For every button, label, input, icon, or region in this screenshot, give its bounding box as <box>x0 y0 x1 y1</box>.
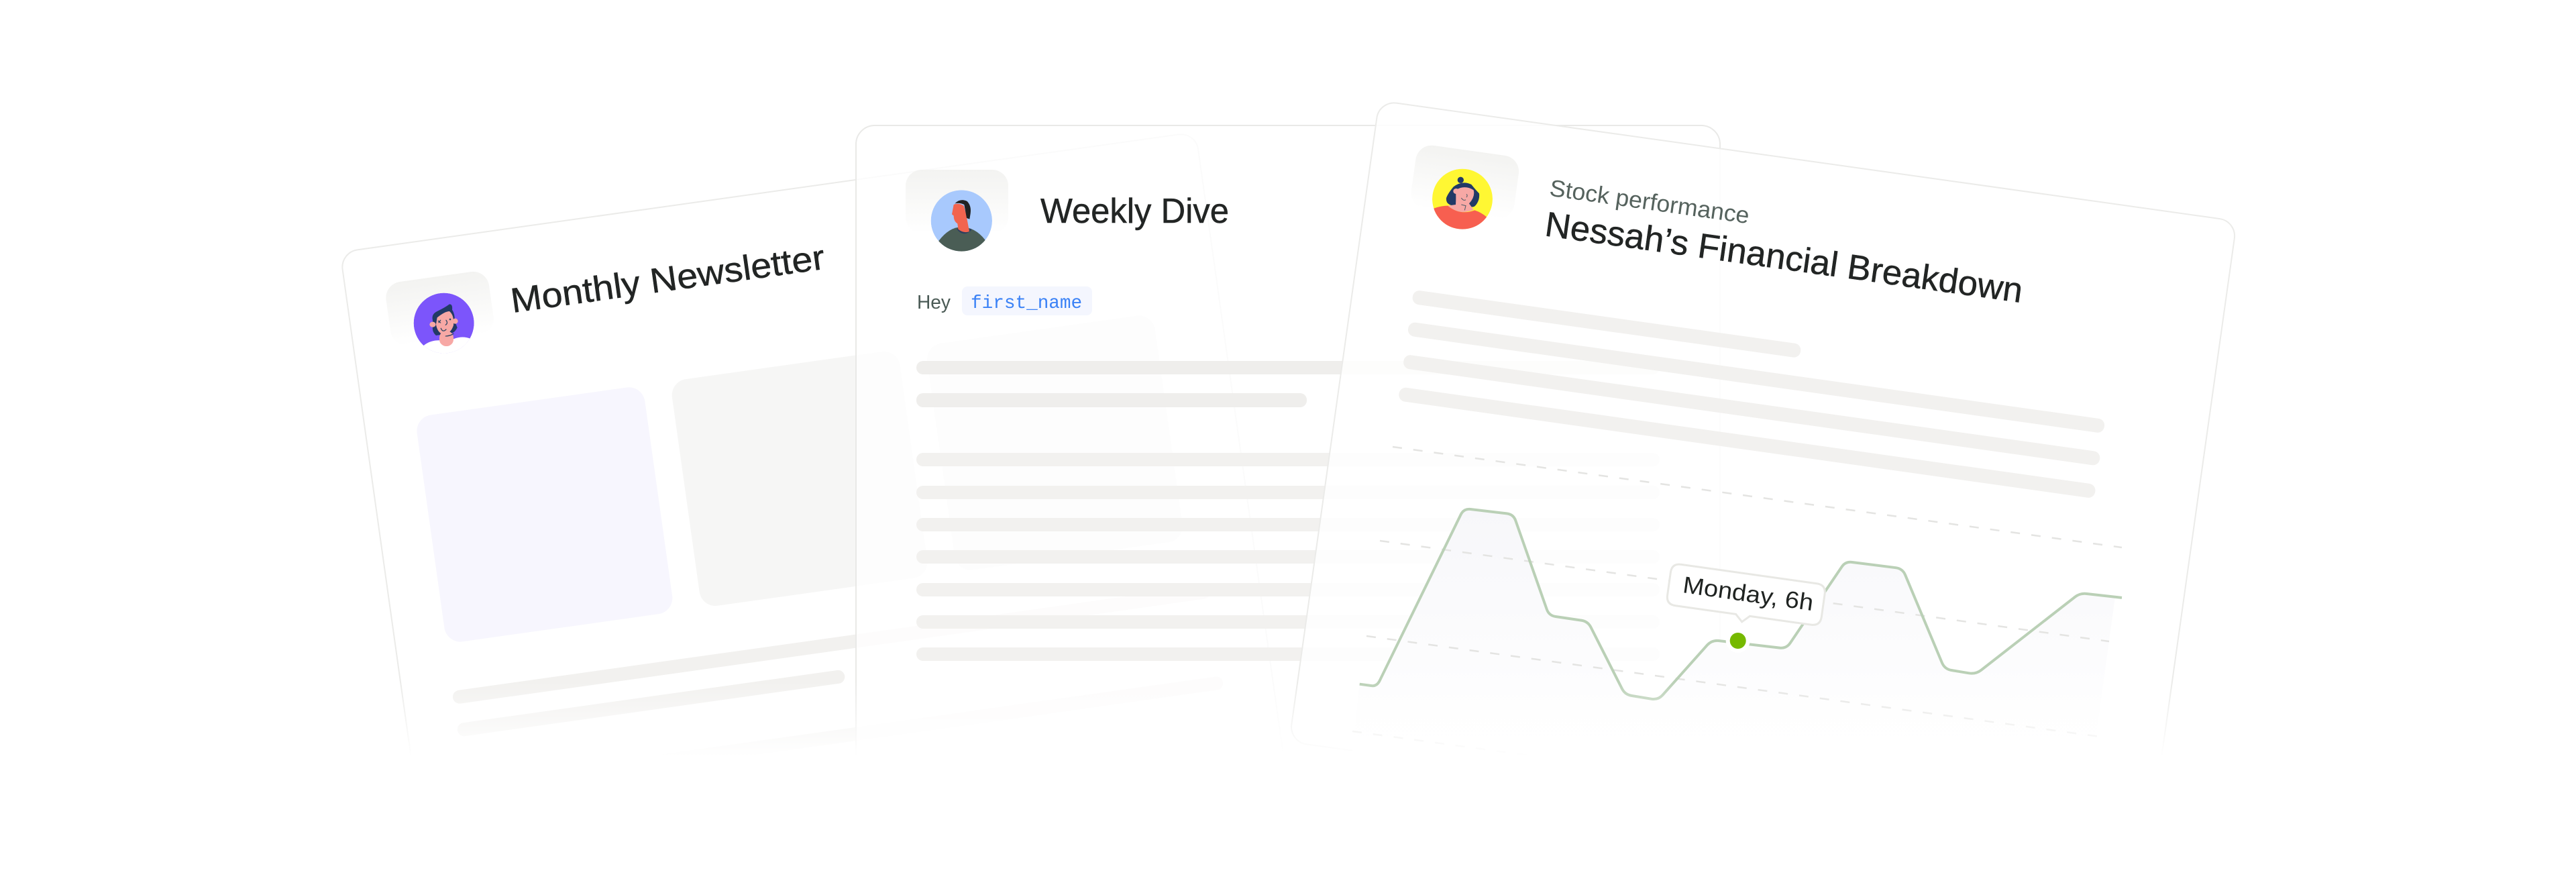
text: greeting: Hey <box>917 292 951 313</box>
image placeholder: lilac block <box>415 385 674 644</box>
tag: first_name variable chip <box>962 286 1092 315</box>
tooltip: Monday, 6h: Monday, 6h <box>1681 572 1815 616</box>
chart data line <box>1360 509 2122 699</box>
text placeholder bar two <box>456 670 846 737</box>
icon: blue avatar <box>931 190 992 253</box>
image placeholder: third block <box>925 313 1185 572</box>
chart marker: green dot <box>1726 629 1750 653</box>
panel: Weekly Dive card <box>856 125 1720 773</box>
text placeholder bar three <box>465 676 1224 796</box>
panel: Monthly Newsletter card <box>342 179 855 729</box>
icon: yellow avatar <box>1432 169 1493 233</box>
chart grid lines <box>1352 447 2122 832</box>
heading: Monthly Newsletter: Monthly Newsletter <box>508 238 827 321</box>
text: Stock performance: Stock performance <box>1548 175 1751 229</box>
chart: line chart with tooltip <box>1352 447 2122 832</box>
icon: purple avatar <box>411 293 476 356</box>
heading: Nessah's Financial Breakdown: Nessah’s Financial Breakdown <box>1543 205 2025 311</box>
tooltip: Monday, 6h <box>1665 563 1826 633</box>
heading: Weekly Dive: Weekly Dive <box>1040 192 1229 231</box>
illustration: three newsletter cards <box>342 102 2235 735</box>
image placeholder: grey block <box>670 350 930 608</box>
text placeholder bars <box>916 361 1660 661</box>
text placeholder bars <box>1398 290 2110 498</box>
text placeholder bar one <box>452 585 1211 704</box>
tag: first_name variable chip: first_name <box>971 293 1082 314</box>
panel: Nessah's Financial Breakdown card <box>1291 102 2235 735</box>
chart area fill <box>1352 509 2115 758</box>
